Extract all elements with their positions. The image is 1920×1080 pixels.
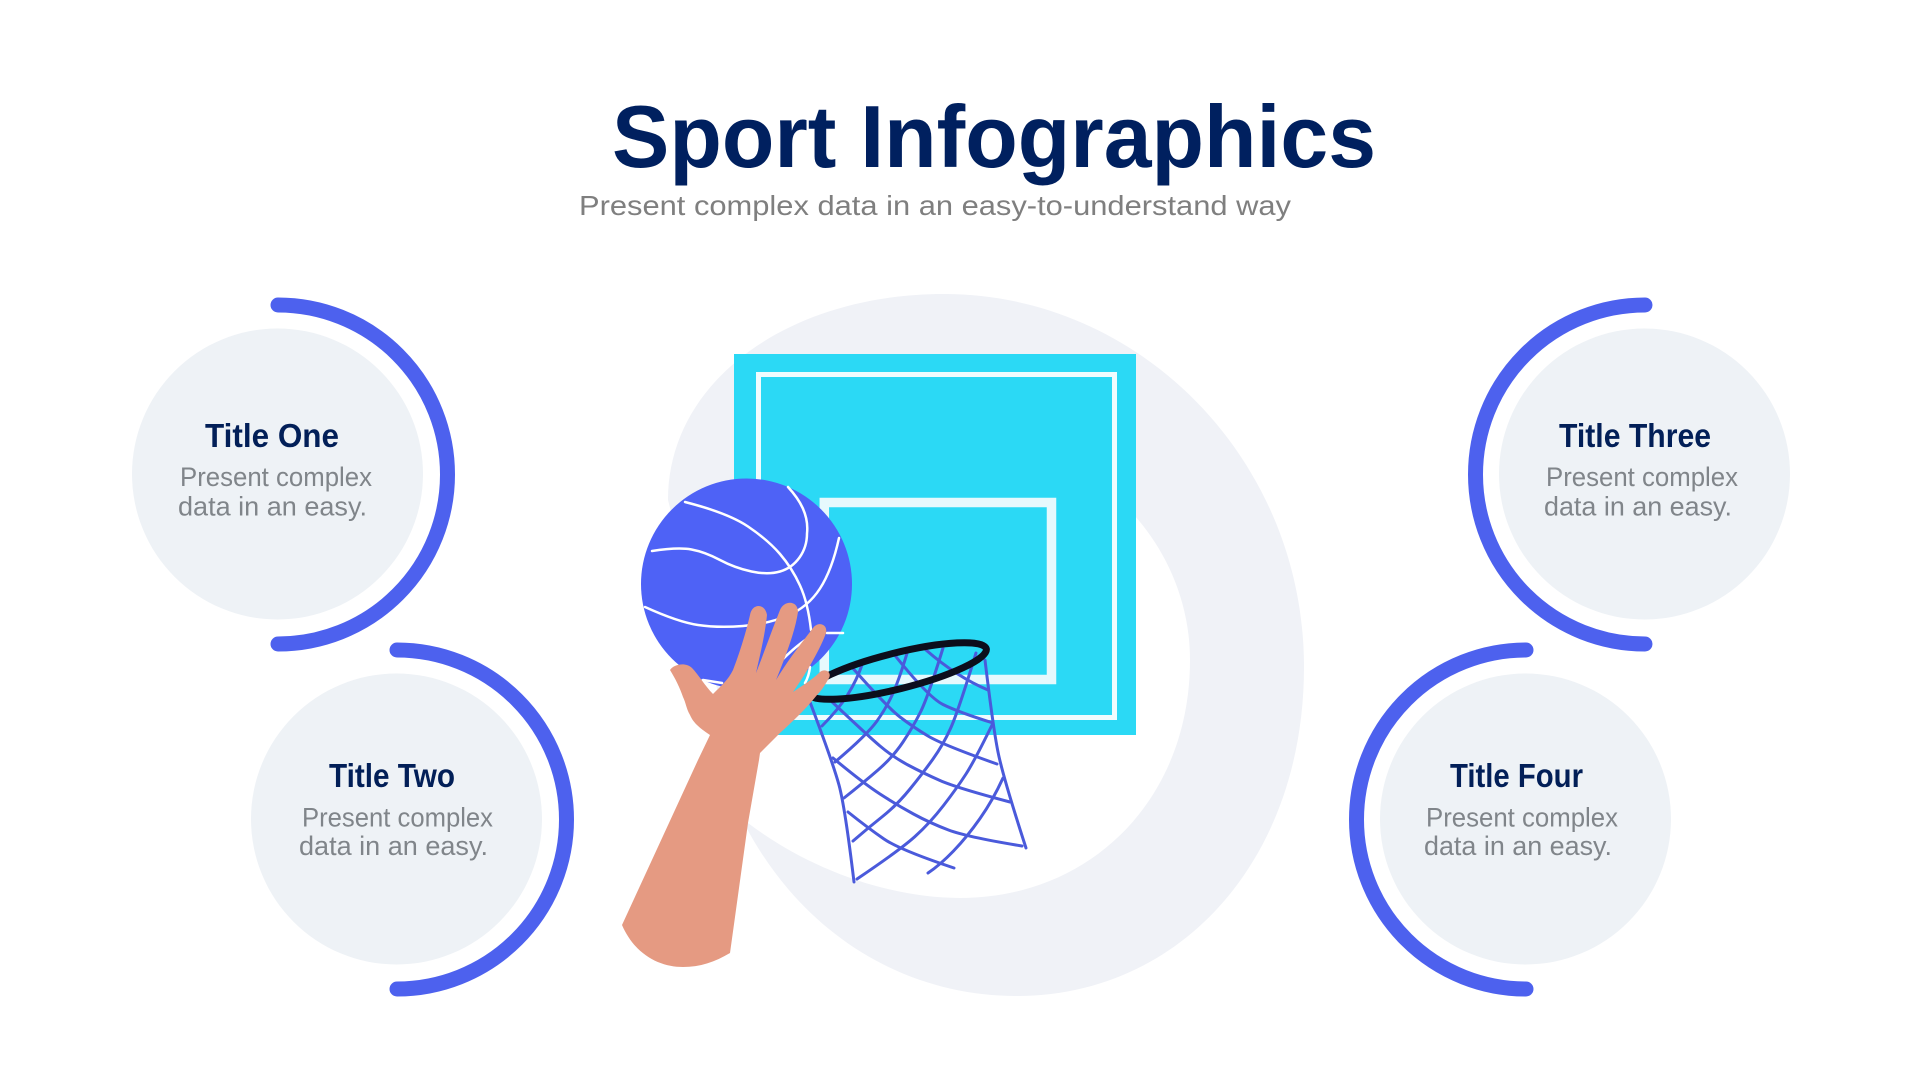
panel: title four: data in an easy. [1424, 831, 1612, 861]
subtitle: Present complex data in an easy-to-understand way [579, 190, 1291, 221]
panel: title three: Present complex [1546, 462, 1738, 492]
title: Sport Infographics [612, 87, 1376, 186]
panel: title one: Present complex [180, 462, 372, 492]
panel: title one: Title One [205, 417, 339, 454]
panel: title four [1356, 650, 1671, 989]
panel: title two: Title Two [329, 757, 455, 794]
panel: title two: Present complex [302, 802, 493, 832]
panel: title one: data in an easy. [178, 492, 367, 522]
panel: title two [251, 650, 566, 989]
panel: title three: data in an easy. [1544, 492, 1732, 522]
panel: title one [132, 305, 448, 644]
icon: hoop rim [803, 631, 991, 711]
panel: title four: Present complex [1426, 802, 1618, 832]
icon: net [810, 648, 1026, 882]
panel: title two: data in an easy. [299, 831, 488, 861]
panel: title three: Title Three [1559, 417, 1711, 454]
background swirl shape [668, 294, 1304, 996]
panel: title four: Title Four [1450, 757, 1583, 794]
icon: hand and arm [622, 603, 830, 967]
panel: title three [1476, 305, 1790, 644]
icon: backboard [734, 354, 1136, 735]
icon: basketball [641, 478, 852, 690]
